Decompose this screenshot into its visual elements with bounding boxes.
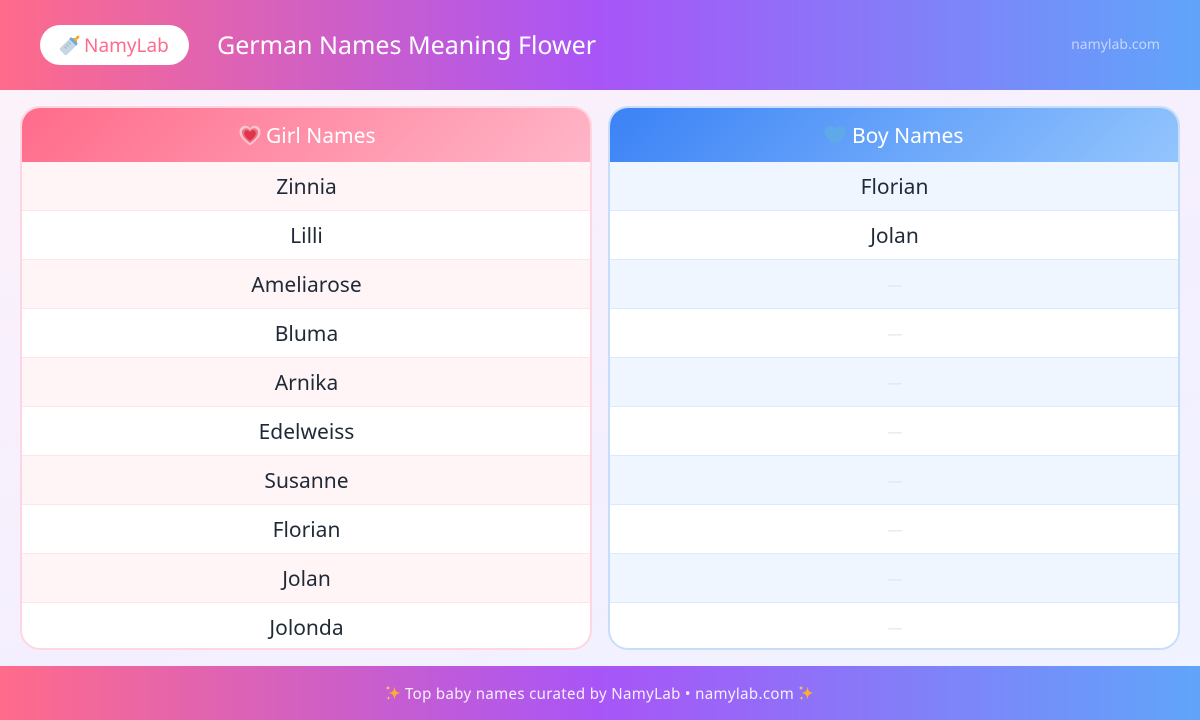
empty row 8: — <box>887 520 902 540</box>
empty row 3: — <box>887 275 902 295</box>
footer bar <box>0 666 1200 720</box>
name row: Florian: Florian <box>273 516 340 544</box>
name row: Ameliarose <box>22 260 590 309</box>
name row: Jolan <box>610 211 1178 260</box>
name row: Arnika <box>22 358 590 407</box>
name row: Jolan: Jolan <box>870 222 919 250</box>
heading text: Girl Names <box>266 122 376 150</box>
icon: baby bottle <box>60 36 80 56</box>
empty row 6 <box>610 407 1178 456</box>
icon: sparkles left <box>386 686 400 700</box>
name row: Bluma <box>22 309 590 358</box>
name row: Jolonda: Jolonda <box>269 614 344 642</box>
heading text: Boy Names <box>852 122 963 150</box>
site url: namylab.com <box>1071 35 1160 54</box>
header bar <box>0 0 1200 90</box>
name row: Jolan: Jolan <box>282 565 331 593</box>
name row: Susanne <box>22 456 590 505</box>
panel: boy names <box>608 106 1180 650</box>
name row: Lilli: Lilli <box>290 222 323 250</box>
name row: Florian: Florian <box>861 173 928 201</box>
logo wordmark: NamyLab <box>84 32 169 58</box>
boy names heading <box>610 108 1178 162</box>
empty row 7 <box>610 456 1178 505</box>
panel: girl names <box>20 106 592 650</box>
name row: Bluma: Bluma <box>275 320 338 348</box>
empty row 8 <box>610 505 1178 554</box>
name row: Edelweiss <box>22 407 590 456</box>
name row: Zinnia <box>22 162 590 211</box>
logo badge <box>40 25 189 65</box>
empty row 7: — <box>887 471 902 491</box>
empty row 9 <box>610 554 1178 603</box>
name row: Edelweiss: Edelweiss <box>259 418 354 446</box>
name row: Lilli <box>22 211 590 260</box>
name row: Jolan <box>22 554 590 603</box>
girl names heading <box>22 108 590 162</box>
footer text: Top baby names curated by NamyLab • namylab.com <box>405 684 794 704</box>
icon: blue heart <box>824 126 846 145</box>
empty row 5 <box>610 358 1178 407</box>
empty row 9: — <box>887 569 902 589</box>
icon: sparkles right <box>798 686 814 700</box>
name row: Ameliarose: Ameliarose <box>251 271 362 299</box>
name row: Florian <box>610 162 1178 211</box>
title: German Names Meaning Flower <box>217 28 596 62</box>
name row: Zinnia: Zinnia <box>276 173 337 201</box>
empty row 10: — <box>887 618 902 638</box>
empty row 4 <box>610 309 1178 358</box>
name row: Florian <box>22 505 590 554</box>
name row: Arnika: Arnika <box>275 369 338 397</box>
empty row 5: — <box>887 373 902 393</box>
name row: Susanne: Susanne <box>264 467 349 495</box>
icon: growing heart <box>240 126 260 146</box>
empty row 6: — <box>887 422 902 442</box>
empty row 3 <box>610 260 1178 309</box>
empty row 4: — <box>887 324 902 344</box>
